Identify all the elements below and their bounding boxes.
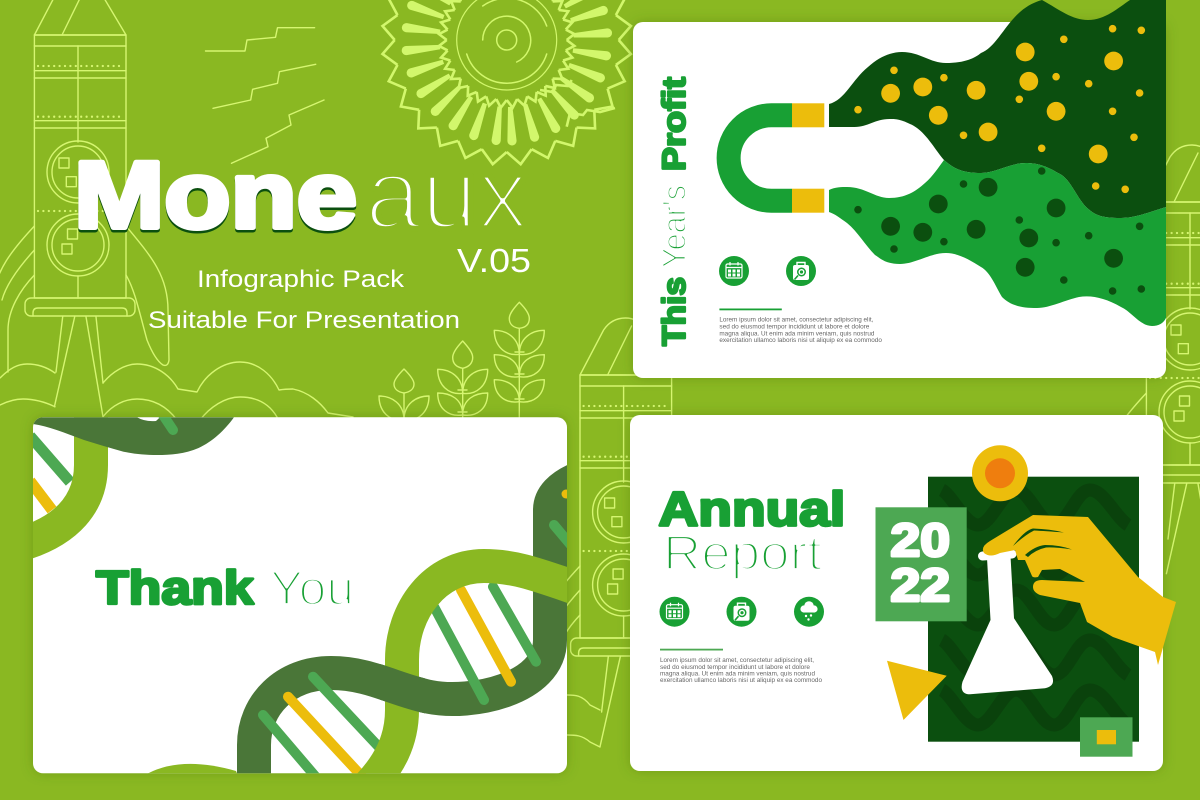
title: Mone bold part: Mone bbox=[74, 142, 357, 248]
icon: calendar bbox=[660, 597, 690, 627]
year card bbox=[876, 507, 967, 621]
divider bbox=[660, 649, 723, 650]
yellow triangle bbox=[887, 661, 947, 720]
clouds bbox=[0, 362, 600, 747]
icon: camera search bbox=[726, 597, 756, 627]
version label: V.05 bbox=[457, 242, 531, 279]
body text: exercitation ullamco laboris nisi ut aliquip ex ea commodo bbox=[719, 337, 882, 344]
body text: magna aliqua. Ut enim ada minim veniam, quis nostrud bbox=[660, 670, 815, 678]
heading: You: You bbox=[270, 562, 354, 615]
title: Mone shadow: Mone bbox=[74, 145, 357, 251]
vertical title: This bbox=[656, 277, 692, 346]
panel: annual report bbox=[630, 415, 1176, 771]
icon: cloud rain bbox=[794, 597, 824, 627]
heading: Thank: Thank bbox=[96, 561, 254, 614]
rocket: left bbox=[0, 0, 169, 417]
panel: this year's profit bbox=[633, 0, 1166, 378]
title: Moneaux bbox=[74, 138, 529, 251]
light wave bbox=[829, 160, 1166, 326]
divider bbox=[719, 308, 782, 310]
flask bbox=[962, 554, 1053, 694]
icon: camera search bbox=[786, 256, 816, 286]
vertical title: Year's bbox=[655, 185, 692, 268]
title: aux light part: aux bbox=[365, 138, 528, 250]
attracted waves with dots bbox=[829, 0, 1166, 326]
body text: sed do eiusmod tempor incididunt ut labore et dolore bbox=[719, 323, 870, 330]
body text bbox=[660, 657, 822, 684]
year card: 20 bbox=[890, 514, 950, 566]
dark wave bbox=[829, 0, 1166, 218]
small square bbox=[1080, 717, 1132, 757]
title: aux light part: aux bbox=[366, 139, 529, 251]
body text: sed do eiusmod tempor incididunt ut labore et dolore bbox=[660, 664, 810, 671]
year card: 22 bbox=[890, 559, 950, 611]
body text: exercitation ullamco laboris nisi ut aliquip ex ea commodo bbox=[660, 677, 822, 684]
heading: Report: Report bbox=[663, 526, 822, 580]
body text: Lorem ipsum dolor sit amet, consectetur adipiscing elit, bbox=[660, 657, 814, 664]
hand bbox=[983, 515, 1176, 665]
heading: Annual: Annual bbox=[658, 484, 845, 536]
dark dots bbox=[854, 167, 1145, 295]
dark patterned card bbox=[928, 477, 1139, 742]
lightning bolts bbox=[206, 28, 324, 163]
body text bbox=[719, 316, 882, 344]
panel: thank you bbox=[25, 415, 600, 790]
vertical title bbox=[655, 77, 692, 346]
subtitle line 1: Infographic Pack bbox=[197, 266, 405, 293]
magnet bbox=[729, 103, 824, 213]
dna helix: bottom right bbox=[140, 478, 600, 790]
coin bbox=[972, 445, 1028, 501]
rocket: right bbox=[1104, 145, 1200, 584]
rocket: centre bbox=[538, 318, 715, 757]
icon: calendar bbox=[719, 256, 749, 286]
vertical title: Profit bbox=[656, 77, 692, 171]
body text: magna aliqua. Ut enim ada minim veniam, quis nostrud bbox=[719, 330, 875, 337]
body text: Lorem ipsum dolor sit amet, consectetur adipiscing elit, bbox=[719, 316, 874, 323]
subtitle line 2: Suitable For Presentation bbox=[148, 307, 460, 334]
sun bbox=[380, 0, 633, 167]
dna helix: top left bbox=[25, 415, 234, 543]
plants bbox=[379, 302, 544, 420]
yellow dots bbox=[854, 25, 1145, 193]
